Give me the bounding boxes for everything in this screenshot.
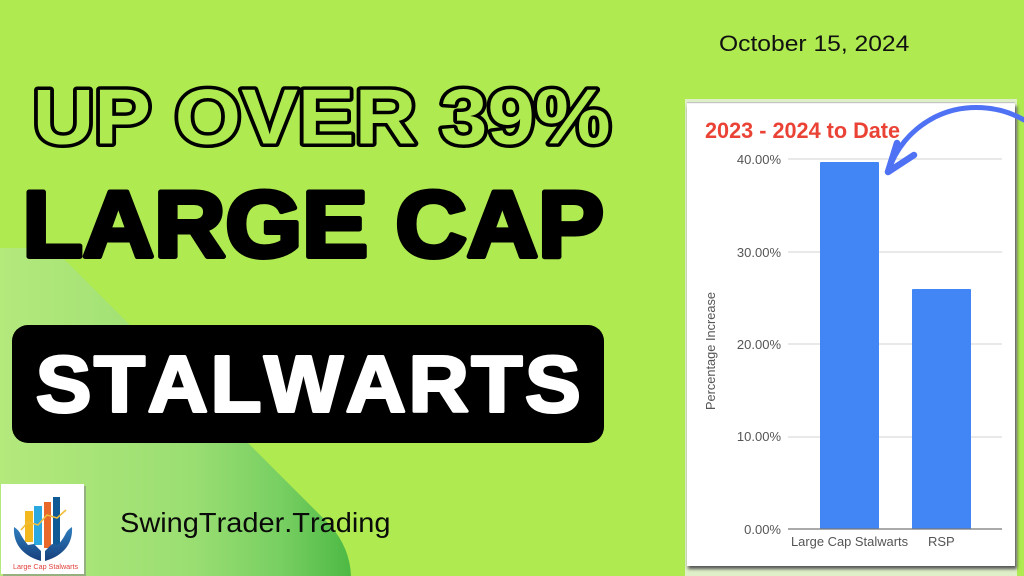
y axis labels	[737, 152, 781, 537]
date: October 15, 2024	[719, 31, 909, 56]
y axis labels: 40.00%	[737, 152, 781, 167]
website text: SwingTrader.Trading	[120, 507, 391, 539]
x axis line	[788, 528, 1002, 530]
x axis labels: Large Cap Stalwarts	[791, 534, 909, 549]
arrow	[888, 107, 1024, 172]
bar: large cap stalwarts	[820, 162, 879, 529]
x axis labels: RSP	[928, 534, 955, 549]
banner: stalwarts: STALWARTS	[36, 340, 583, 429]
chart title: 2023 - 2024 to Date	[705, 118, 900, 143]
banner: stalwarts	[12, 325, 604, 443]
y axis labels: 10.00%	[737, 429, 781, 444]
bar: RSP	[912, 289, 971, 529]
y axis labels: 20.00%	[737, 337, 781, 352]
panel: chart card	[685, 99, 1017, 576]
logo: Large Cap Stalwarts	[13, 562, 79, 571]
gradient corner shape	[0, 248, 351, 576]
logo	[1, 484, 86, 576]
y axis labels: 0.00%	[744, 522, 781, 537]
y axis labels: 30.00%	[737, 245, 781, 260]
headline: up over 39%: UP OVER 39%	[33, 74, 611, 161]
gridlines	[788, 159, 1002, 437]
headline: large cap: LARGE CAP	[22, 173, 604, 277]
y axis title: Percentage Increase	[703, 292, 718, 410]
